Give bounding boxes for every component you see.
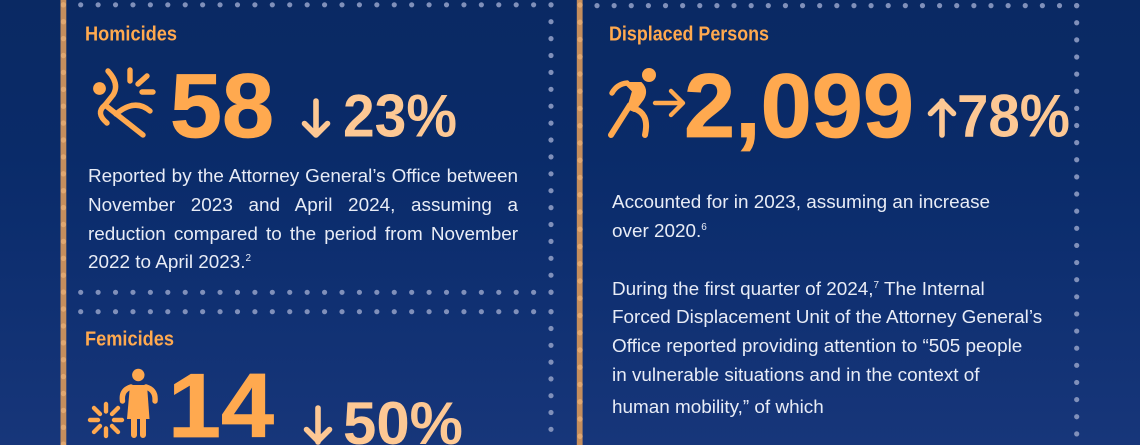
icon: person running with arrow	[611, 68, 683, 135]
stat: 23%: 23%	[343, 82, 457, 150]
text block: homicides description: November 2023 and April 2024, assuming a	[88, 195, 518, 216]
arrow: down 23%	[304, 101, 328, 135]
text block: displaced persons first quarter 2024: During the first quarter of 2024,7 The Internal	[612, 279, 985, 300]
text block: displaced persons first quarter 2024: Office reported providing attention to “505 people	[612, 336, 1022, 357]
text block: displaced persons first quarter 2024: Forced Displacement Unit of the Attorney General’s	[612, 307, 1042, 328]
text block: displaced persons first quarter 2024	[612, 279, 1042, 418]
icon: person falling	[93, 70, 153, 135]
stat: 2,099: 2,099	[684, 56, 914, 157]
text block: displaced persons first quarter 2024: in vulnerable situations and in the context of	[612, 365, 980, 386]
stat: 78%: 78%	[957, 82, 1070, 150]
text block: homicides description: 2022 to April 2023.2	[88, 252, 251, 273]
arrow: down 50%	[306, 408, 330, 442]
text block: displaced persons 2023	[612, 192, 990, 242]
text block: displaced persons 2023: Accounted for in 2023, assuming an increase	[612, 192, 990, 213]
text block: displaced persons first quarter 2024: human mobility,” of which	[612, 397, 824, 418]
text block: homicides description	[88, 166, 518, 273]
text block: homicides description: Reported by the Attorney General’s Office between	[88, 166, 518, 187]
icon: woman with burst	[90, 369, 155, 436]
stat: 58: 58	[170, 56, 274, 157]
heading: Femicides: Femicides	[85, 328, 174, 350]
heading: Homicides: Homicides	[85, 24, 177, 46]
text block: displaced persons 2023: over 2020.6	[612, 221, 707, 242]
text block: homicides description: reduction compared to the period from November	[88, 224, 518, 245]
left orange border	[60, 0, 66, 445]
arrow: up 78%	[930, 101, 954, 135]
heading: Displaced Persons: Displaced Persons	[609, 24, 769, 46]
center orange border	[577, 0, 583, 445]
